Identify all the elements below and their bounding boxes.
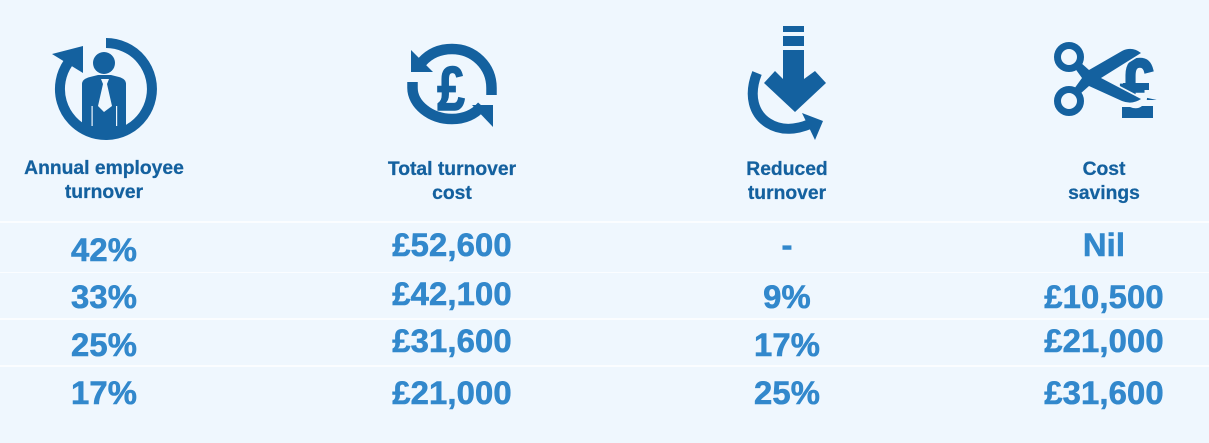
column: cost savings values: £10,500 [1044,278,1164,315]
heading: annual employee turnover: turnover [65,182,143,203]
column: total turnover cost values: £42,100 [392,275,512,312]
heading: cost savings [1068,159,1140,204]
icon: scissors cutting pound: £ [1120,43,1156,133]
column: annual employee turnover values [71,231,137,411]
column: reduced turnover values [754,226,820,411]
heading: annual employee turnover: Annual employee [24,158,184,179]
column: annual employee turnover values: 42% [71,231,137,268]
column: total turnover cost values [392,226,512,411]
column: cost savings values: £31,600 [1044,374,1164,411]
heading: cost savings: Cost [1083,159,1125,180]
column: cost savings values: £21,000 [1044,322,1164,359]
column: cost savings values [1044,226,1164,411]
icon: pound with exchange arrows: £ [437,54,465,123]
icon: reduced arrow [753,26,826,140]
heading: total turnover cost: Total turnover [388,159,516,180]
icon: pound with exchange arrows [411,49,493,127]
icon: scissors cutting pound [1054,42,1156,118]
column: cost savings values: Nil [1083,226,1125,263]
heading: reduced turnover: Reduced [746,159,828,180]
column: annual employee turnover values: 25% [71,326,137,363]
column: reduced turnover values: 17% [754,326,820,363]
icon: employee with circular arrow [52,43,152,135]
heading: reduced turnover: turnover [748,183,826,204]
column: reduced turnover values: 25% [754,374,820,411]
column: reduced turnover values: - [781,226,793,263]
column: annual employee turnover values: 17% [71,374,137,411]
column: total turnover cost values: £31,600 [392,322,512,359]
heading: total turnover cost [388,159,516,204]
heading: cost savings: savings [1068,183,1140,204]
column: total turnover cost values: £52,600 [392,226,512,263]
heading: reduced turnover [746,159,828,204]
column: total turnover cost values: £21,000 [392,374,512,411]
icons row [52,26,1156,140]
column: reduced turnover values: 9% [763,278,811,315]
heading: total turnover cost: cost [432,183,472,204]
column: annual employee turnover values: 33% [71,278,137,315]
heading: annual employee turnover [24,158,184,203]
